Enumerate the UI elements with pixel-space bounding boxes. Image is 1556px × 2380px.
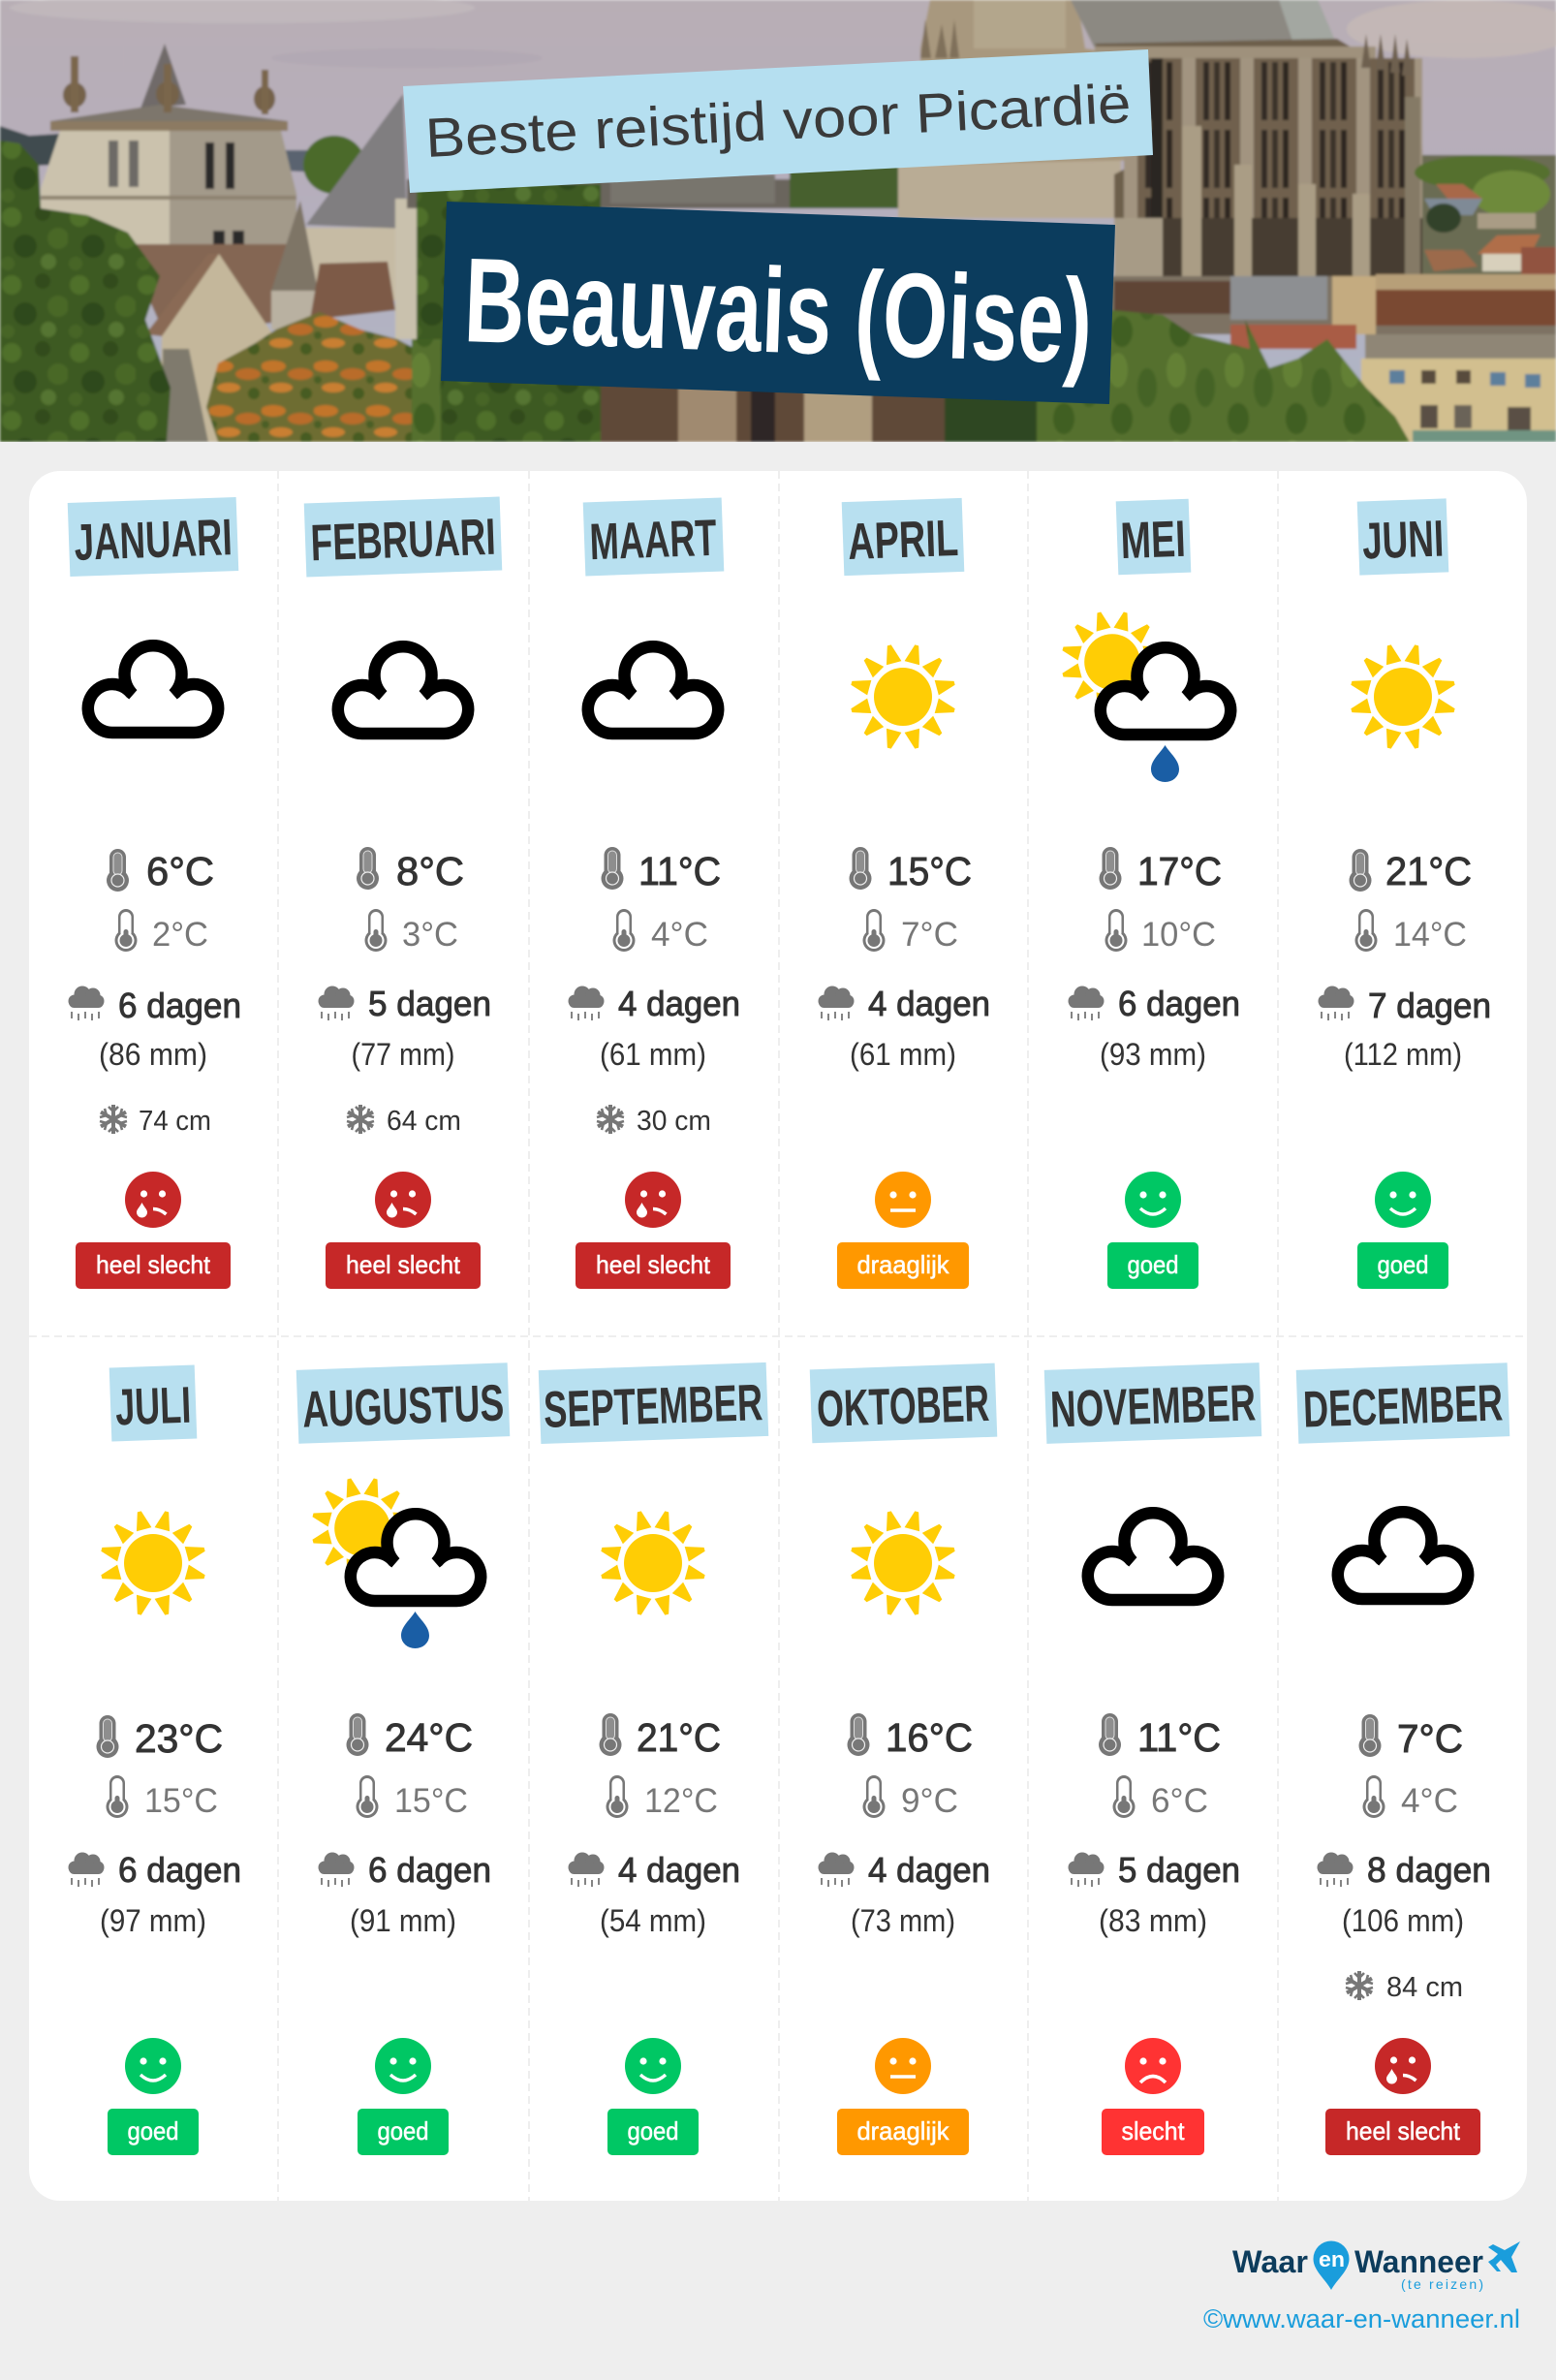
- rating badge: [1107, 1242, 1198, 1289]
- icon: bad face: [1125, 2038, 1181, 2094]
- logo: Waar en Wanneer: [1232, 2240, 1520, 2292]
- snowfall: 74 cm: [139, 1106, 211, 1137]
- month label: SEPTEMBER: [543, 1374, 763, 1439]
- month label: [1116, 499, 1191, 575]
- title banner: Beauvais (Oise): [441, 202, 1115, 404]
- rating badge: [837, 2109, 969, 2155]
- icon: rain: [568, 1853, 605, 1887]
- snowfall: 64 cm: [387, 1106, 461, 1137]
- icon: thermometer high: [601, 847, 624, 890]
- rating badge: draaglijk: [856, 2116, 949, 2145]
- icon: thermometer high: [847, 1713, 870, 1756]
- rating badge: heel slecht: [346, 1250, 461, 1279]
- icon: thermometer high: [97, 1715, 118, 1758]
- high temperature: 7°C: [1397, 1716, 1463, 1761]
- rainfall: (91 mm): [350, 1903, 456, 1938]
- rating badge: [108, 2109, 199, 2155]
- low temperature: 14°C: [1393, 916, 1467, 954]
- icon: sun: [1350, 643, 1456, 750]
- high temperature: 11°C: [638, 849, 721, 893]
- low temperature: 9°C: [901, 1782, 958, 1820]
- rating badge: [76, 1242, 231, 1289]
- icon: cloud: [88, 645, 218, 733]
- rating badge: goed: [1378, 1250, 1428, 1279]
- icon: thermometer high: [107, 849, 129, 892]
- month: december: [1296, 1362, 1509, 2155]
- low temperature: 15°C: [394, 1782, 468, 1820]
- icon: thermometer low: [607, 1775, 628, 1818]
- rain days: 6 dagen: [1118, 984, 1240, 1023]
- month: mei: [1061, 499, 1240, 1289]
- rating badge: goed: [128, 2116, 178, 2145]
- icon: rain: [1068, 986, 1105, 1020]
- month label: NOVEMBER: [1049, 1374, 1257, 1439]
- title banner: Beste reistijd voor Picardië: Beste reistijd voor Picardië: [423, 73, 1133, 170]
- icon: cloud: [1088, 1513, 1218, 1600]
- low temperature: 3°C: [402, 916, 458, 954]
- rain days: 5 dagen: [368, 984, 491, 1023]
- month label: JULI: [114, 1377, 192, 1436]
- icon: map pin: [1314, 2240, 1349, 2290]
- high temperature: 24°C: [385, 1715, 473, 1760]
- icon: sun behind rain cloud: [1061, 611, 1230, 782]
- icon: thermometer high: [1349, 849, 1372, 892]
- icon: cloud: [588, 646, 718, 734]
- rain days: 4 dagen: [618, 984, 740, 1023]
- icon: thermometer high: [599, 1713, 622, 1756]
- rating badge: draaglijk: [856, 1250, 949, 1279]
- rating badge: [576, 1242, 731, 1289]
- month label: MAART: [589, 510, 718, 571]
- month: augustus: [296, 1362, 510, 2155]
- icon: thermometer high: [347, 1713, 368, 1756]
- icon: sun: [100, 1510, 206, 1616]
- month label: [296, 1362, 510, 1444]
- icon: thermometer high: [1099, 1713, 1121, 1756]
- logo: Waar en Wanneer: Wanneer: [1354, 2244, 1483, 2279]
- icon: thermometer low: [364, 909, 388, 952]
- low temperature: 6°C: [1151, 1782, 1208, 1820]
- rating badge: goed: [378, 2116, 428, 2145]
- rainfall: (61 mm): [850, 1037, 956, 1072]
- icon: rain: [818, 986, 855, 1020]
- low temperature: 15°C: [144, 1782, 218, 1820]
- icon: rain: [68, 986, 105, 1020]
- icon: good face: [375, 2038, 431, 2094]
- month label: FEBRUARI: [310, 509, 497, 572]
- high temperature: 21°C: [637, 1715, 721, 1760]
- month: oktober: [810, 1363, 997, 2155]
- rating badge: heel slecht: [96, 1250, 211, 1279]
- icon: thermometer high: [357, 847, 379, 890]
- high temperature: 11°C: [1137, 1715, 1221, 1760]
- rainfall: (106 mm): [1342, 1903, 1464, 1938]
- icon: sun behind rain cloud: [311, 1477, 481, 1648]
- month label: [1357, 498, 1448, 576]
- month label: JANUARI: [74, 509, 233, 572]
- rating badge: heel slecht: [1346, 2116, 1461, 2145]
- logo: Waar en Wanneer: en: [1319, 2247, 1345, 2271]
- icon: snow: [1346, 1971, 1373, 2000]
- month: januari: [68, 497, 241, 1289]
- month label: APRIL: [847, 510, 959, 571]
- icon: thermometer low: [114, 909, 138, 952]
- month label: [1044, 1362, 1261, 1444]
- icon: plane: [1488, 2241, 1520, 2272]
- icon: rain: [318, 986, 355, 1020]
- month label: [810, 1363, 997, 1443]
- month: maart: [568, 498, 740, 1289]
- icon: thermometer high: [1099, 847, 1122, 890]
- icon: cloud: [1338, 1512, 1468, 1599]
- rain days: 4 dagen: [868, 1850, 990, 1890]
- high temperature: 15°C: [887, 849, 972, 893]
- month label: MEI: [1120, 511, 1187, 570]
- rainfall: (83 mm): [1099, 1903, 1207, 1938]
- icon: cloud: [338, 646, 468, 734]
- month label: OKTOBER: [816, 1375, 990, 1438]
- high temperature: 17°C: [1137, 849, 1222, 893]
- rating badge: [1357, 1242, 1448, 1289]
- icon: rain: [568, 986, 605, 1020]
- rain days: 7 dagen: [1368, 986, 1491, 1025]
- rainfall: (77 mm): [351, 1037, 455, 1072]
- month label: [583, 498, 724, 576]
- icon: good face: [1375, 1172, 1431, 1228]
- title banner: Beste reistijd voor Picardië: [403, 49, 1153, 193]
- low temperature: 4°C: [1401, 1782, 1458, 1820]
- icon: rain: [1068, 1853, 1105, 1887]
- icon: very bad face: [375, 1172, 431, 1228]
- rainfall: (73 mm): [851, 1903, 955, 1938]
- icon: rain: [1318, 1853, 1353, 1887]
- rating badge: goed: [1128, 1250, 1178, 1279]
- low temperature: 2°C: [152, 916, 208, 954]
- icon: very bad face: [125, 1172, 181, 1228]
- high temperature: 16°C: [886, 1715, 973, 1760]
- rain days: 5 dagen: [1118, 1850, 1240, 1890]
- icon: tolerable face: [875, 1172, 931, 1228]
- month: april: [818, 498, 990, 1289]
- icon: thermometer high: [849, 847, 872, 890]
- icon: snow: [100, 1105, 127, 1134]
- icon: thermometer high: [1358, 1714, 1382, 1757]
- rating badge: [837, 1242, 969, 1289]
- rain days: 8 dagen: [1367, 1850, 1491, 1890]
- month label: [68, 497, 238, 577]
- icon: sun: [850, 1510, 956, 1616]
- month label: [842, 498, 964, 576]
- rain days: 6 dagen: [118, 1850, 241, 1890]
- month: juli: [68, 1364, 241, 2155]
- rain days: 6 dagen: [368, 1850, 491, 1890]
- month label: AUGUSTUS: [301, 1374, 505, 1439]
- rainfall: (54 mm): [600, 1903, 706, 1938]
- high temperature: 8°C: [396, 849, 464, 893]
- month: juni: [1318, 498, 1491, 1289]
- month label: [304, 496, 502, 578]
- rating badge: slecht: [1122, 2116, 1185, 2145]
- icon: snow: [347, 1105, 374, 1134]
- icon: thermometer low: [107, 1775, 128, 1818]
- icon: good face: [1125, 1172, 1181, 1228]
- icon: snow: [597, 1105, 624, 1134]
- icon: thermometer low: [612, 909, 636, 952]
- icon: thermometer low: [1362, 1775, 1385, 1818]
- month label: [539, 1362, 768, 1444]
- icon: thermometer low: [357, 1775, 378, 1818]
- month label: [1296, 1362, 1509, 1444]
- rain days: 4 dagen: [868, 984, 990, 1023]
- low temperature: 10°C: [1141, 916, 1216, 954]
- icon: sun: [850, 643, 956, 750]
- snowfall: 30 cm: [637, 1106, 711, 1137]
- icon: tolerable face: [875, 2038, 931, 2094]
- rating badge: [326, 1242, 481, 1289]
- month label: JUNI: [1361, 511, 1445, 570]
- rating badge: heel slecht: [596, 1250, 711, 1279]
- panel: white month card: [29, 471, 1527, 2201]
- high temperature: 6°C: [146, 849, 214, 893]
- icon: rain: [318, 1853, 355, 1887]
- high temperature: 23°C: [135, 1716, 223, 1761]
- rating badge: [607, 2109, 699, 2155]
- rating badge: [358, 2109, 449, 2155]
- rain days: 4 dagen: [618, 1850, 740, 1890]
- month label: [109, 1364, 197, 1442]
- rainfall: (112 mm): [1344, 1037, 1462, 1072]
- icon: thermometer low: [862, 1775, 886, 1818]
- icon: thermometer low: [1354, 909, 1378, 952]
- rainfall: (93 mm): [1100, 1037, 1206, 1072]
- month: september: [539, 1362, 768, 2155]
- rainfall: (86 mm): [99, 1037, 207, 1072]
- logo: Waar en Wanneer: (te reizen): [1401, 2276, 1483, 2292]
- icon: rain: [1318, 986, 1354, 1020]
- month: november: [1044, 1362, 1261, 2155]
- snowfall: 84 cm: [1386, 1972, 1463, 2003]
- rainfall: (97 mm): [100, 1903, 206, 1938]
- icon: rain: [818, 1853, 855, 1887]
- low temperature: 7°C: [901, 916, 958, 954]
- icon: thermometer low: [1105, 909, 1128, 952]
- icon: rain: [68, 1853, 105, 1887]
- icon: very bad face: [1375, 2038, 1431, 2094]
- rainfall: (61 mm): [600, 1037, 706, 1072]
- icon: thermometer low: [1112, 1775, 1136, 1818]
- header photo: Beauvais townscape: [0, 0, 1556, 442]
- icon: sun: [600, 1510, 706, 1616]
- low temperature: 12°C: [644, 1782, 718, 1820]
- icon: thermometer low: [862, 909, 886, 952]
- icon: good face: [125, 2038, 181, 2094]
- icon: very bad face: [625, 1172, 681, 1228]
- low temperature: 4°C: [651, 916, 708, 954]
- logo: Waar en Wanneer: Waar: [1232, 2244, 1308, 2279]
- rating badge: [1325, 2109, 1480, 2155]
- month: februari: [304, 496, 502, 1289]
- title banner: Beauvais (Oise): Beauvais (Oise): [462, 234, 1094, 390]
- rating badge: goed: [628, 2116, 678, 2145]
- copyright url: ©www.waar-en-wanneer.nl: [1203, 2304, 1520, 2333]
- high temperature: 21°C: [1385, 849, 1472, 893]
- rain days: 6 dagen: [118, 986, 241, 1025]
- icon: good face: [625, 2038, 681, 2094]
- rating badge: [1102, 2109, 1204, 2155]
